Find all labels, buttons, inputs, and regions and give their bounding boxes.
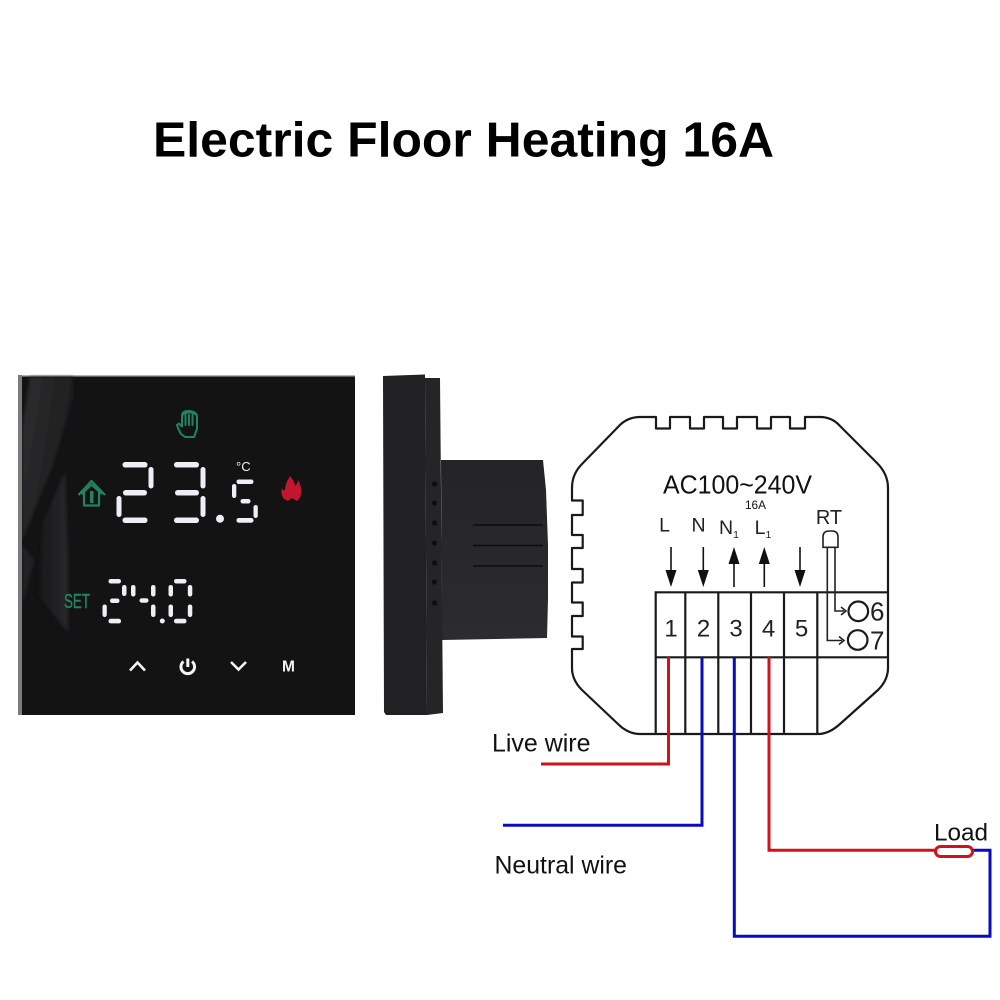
terminal numbers: 5 [795,616,808,642]
set temperature reading [102,579,192,624]
terminal labels: 1 [733,529,739,541]
neutral wire [503,657,702,825]
panel: thermostat side view [383,374,548,715]
terminal numbers [664,616,808,642]
icon: down button [231,662,246,670]
panel: wiring diagram housing [572,417,888,734]
RT sensor probe and leads [823,531,846,644]
terminal labels: RT [816,507,842,529]
current label: 16A [745,498,766,512]
voltage label: AC100~240V [663,470,813,500]
terminal labels: 1 [766,529,772,541]
load label: Load [934,820,988,846]
degree Celsius unit: °C [236,459,251,474]
load return wire [734,657,990,936]
arrows: terminal directions [666,547,806,587]
terminal numbers: 3 [729,616,743,642]
load element [936,846,972,856]
sensor terminals 6 and 7: 6 [870,596,884,626]
title: Electric Floor Heating 16A [153,112,774,168]
icon: up button [130,662,145,670]
terminal labels: N [719,517,733,539]
sensor terminals 6 and 7 [848,596,884,656]
terminal labels: N [691,514,706,536]
icon: power button [181,658,195,674]
panel: thermostat front view [18,375,355,715]
terminal labels [659,507,842,541]
large temperature reading [116,462,258,523]
terminal numbers: 4 [762,616,775,642]
icon: hand mode [177,411,197,437]
M button: M [282,658,295,676]
icon: house temperature [78,481,105,506]
live wire [541,657,668,764]
icon: flame [281,476,301,501]
live wire label: Live wire [492,730,590,758]
terminal labels: L [755,517,766,539]
terminal numbers: 1 [664,616,678,642]
neutral wire label: Neutral wire [494,852,627,880]
terminal block [656,592,888,734]
SET label: SET [64,591,90,613]
terminal labels: L [659,514,670,536]
terminal numbers: 2 [697,616,710,642]
sensor terminals 6 and 7: 7 [870,626,884,656]
load feed wire [769,657,935,850]
